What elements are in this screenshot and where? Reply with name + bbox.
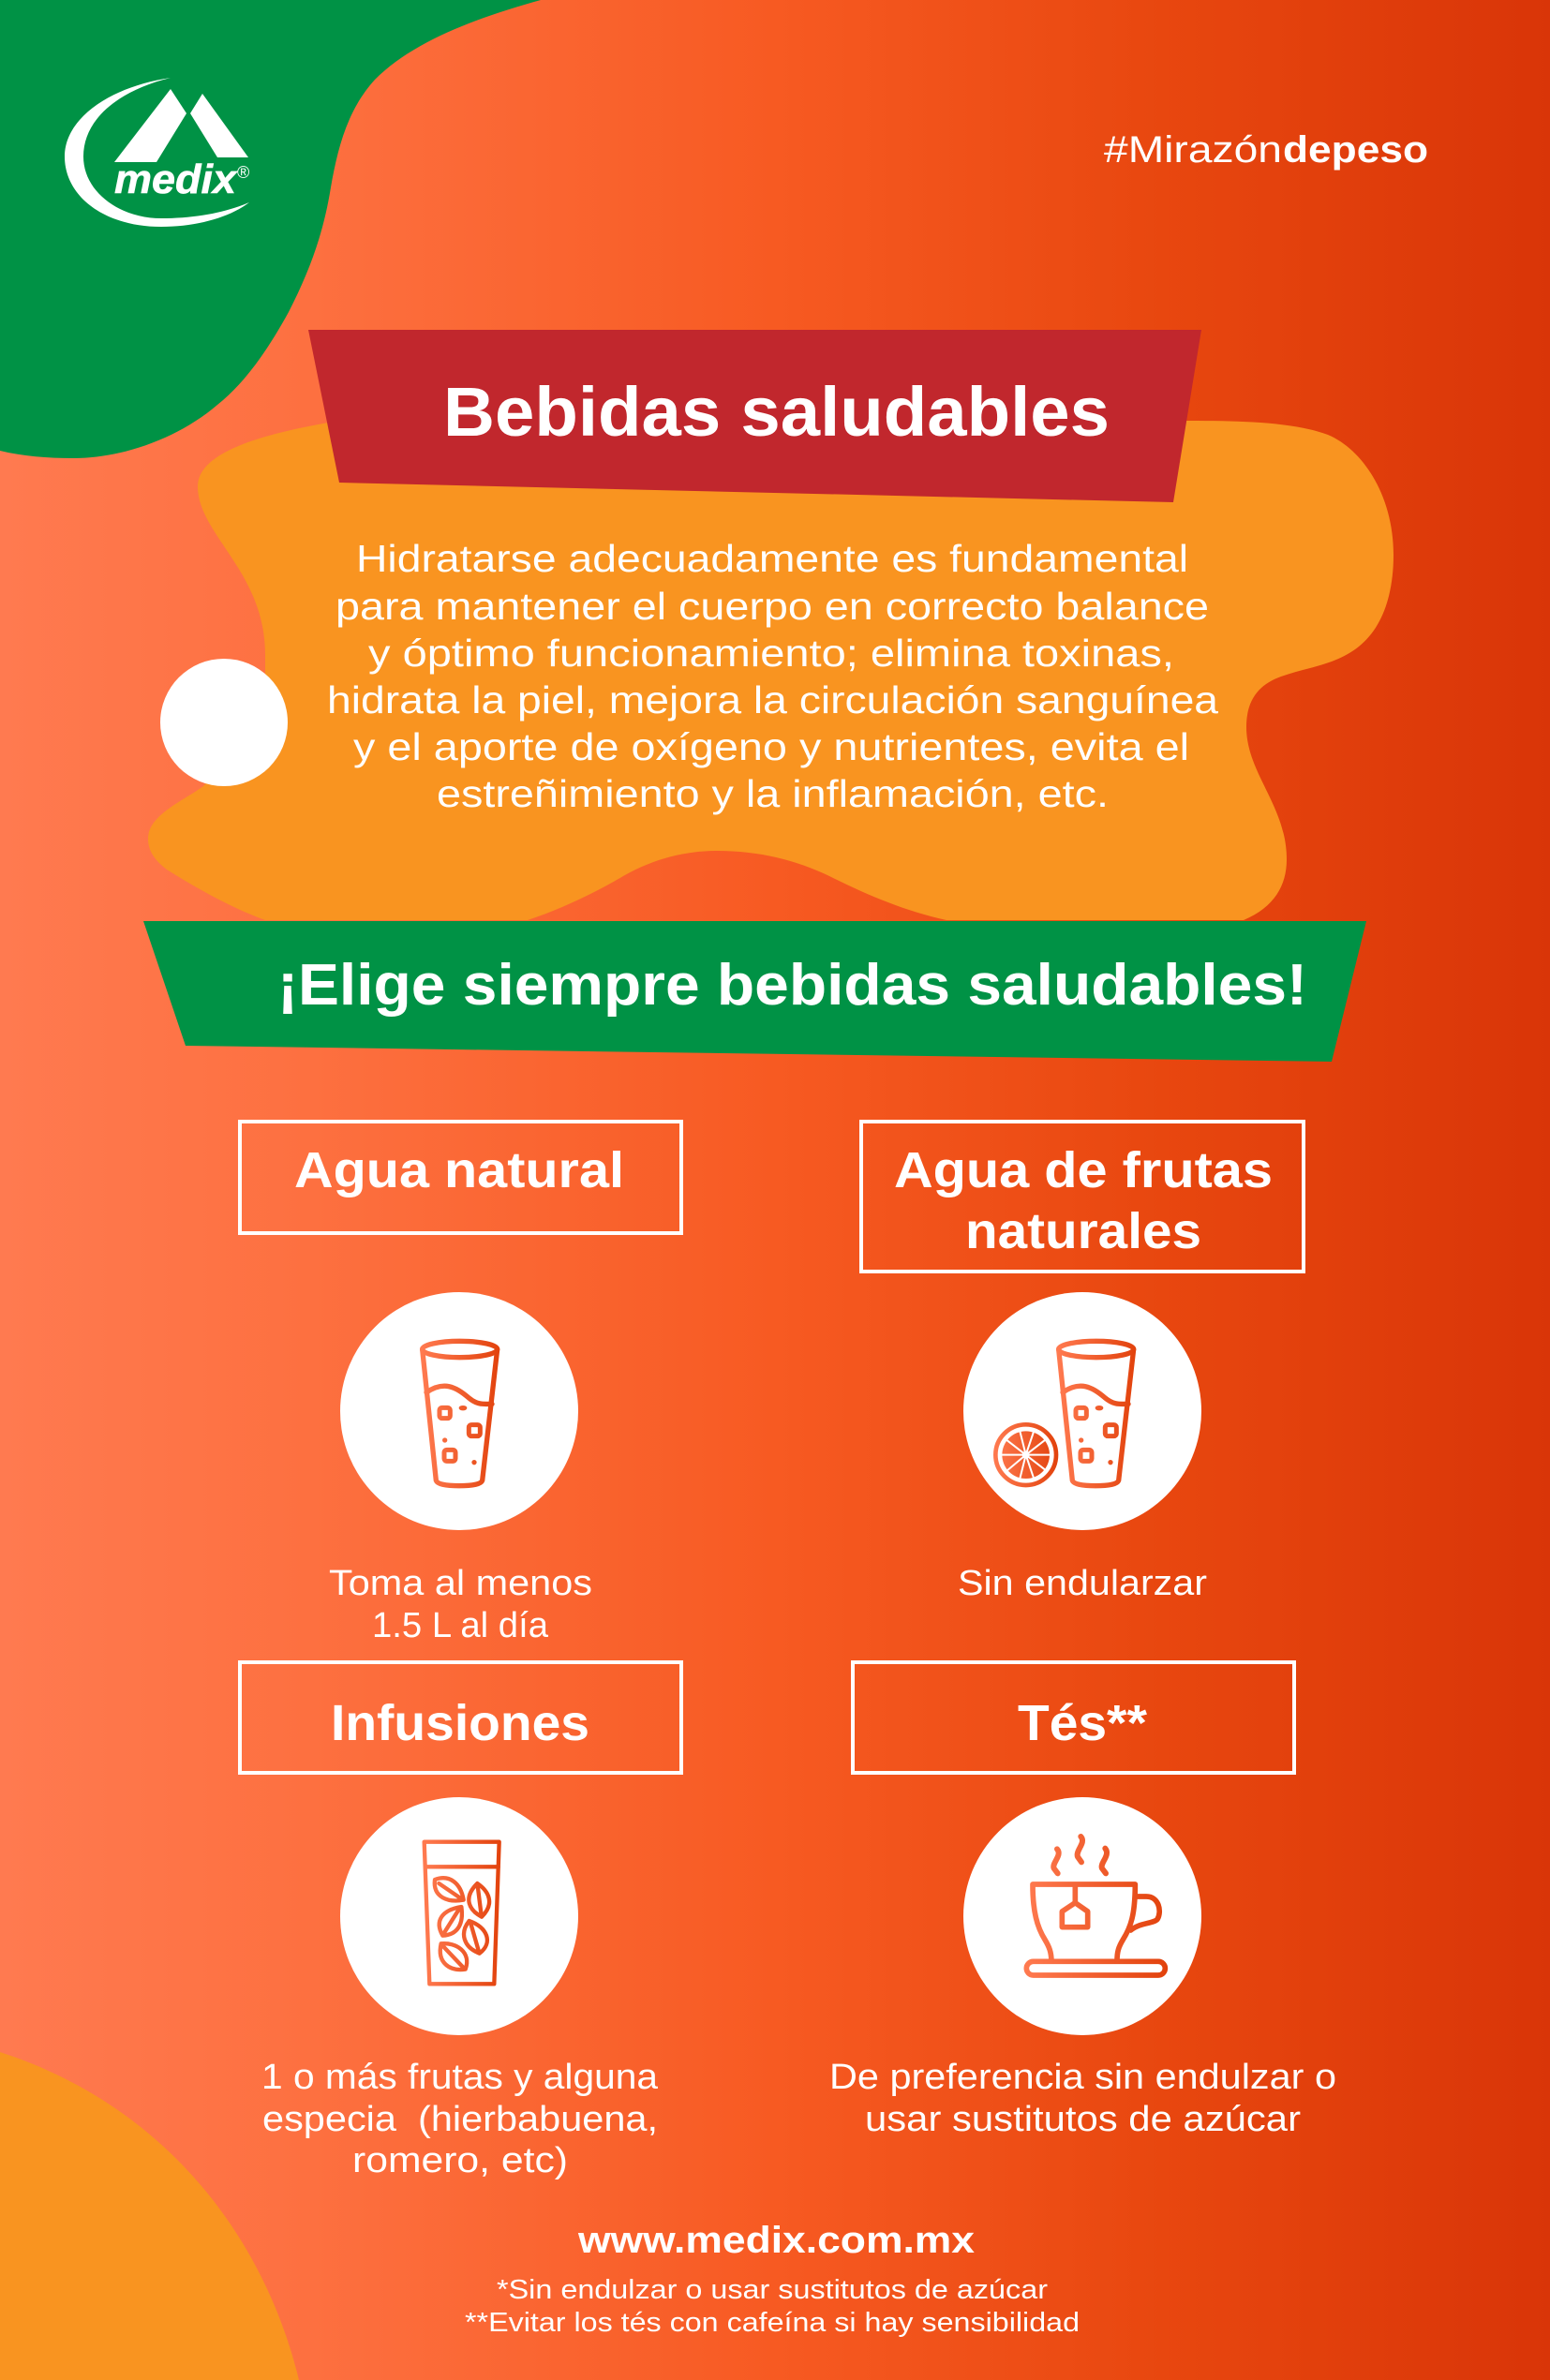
orange intro blob (148, 421, 1394, 920)
caption: infusiones: 1 o más frutas y alguna (261, 2058, 659, 2097)
caption: agua natural (329, 1564, 592, 1645)
card: tes (829, 1662, 1336, 2139)
card: agua natural (240, 1122, 681, 1645)
intro text: Hidratarse adecuadamente es fundamental (356, 537, 1188, 580)
title banner: Bebidas saludables (443, 373, 1110, 451)
caption: infusiones: romero, etc) (352, 2141, 568, 2180)
intro text: y óptimo funcionamiento; elimina toxinas, (368, 632, 1174, 675)
intro text: estreñimiento y la inflamación, etc. (437, 772, 1109, 815)
white circle (160, 659, 288, 786)
icon: glass and orange slice (963, 1292, 1201, 1530)
heading: agua natural (240, 1122, 681, 1233)
logo: medix (65, 78, 249, 227)
card: agua de frutas (861, 1122, 1304, 1603)
caption: agua natural: Toma al menos (329, 1564, 592, 1603)
green banner: ¡Elige siempre bebidas saludables! (277, 953, 1307, 1018)
card: infusiones (240, 1662, 681, 2180)
footnotes (465, 2275, 1080, 2338)
heading: infusiones: Infusiones (331, 1695, 589, 1751)
footnotes: *Sin endulzar o usar sustitutos de azúcar (497, 2275, 1048, 2305)
logo: medix: ® (237, 163, 249, 182)
logo: medix: medix (114, 156, 238, 202)
heading: agua de frutas: Agua de frutas (894, 1142, 1273, 1198)
footnotes: **Evitar los tés con cafeína si hay sensibilidad (465, 2308, 1080, 2338)
caption: infusiones (261, 2058, 659, 2180)
intro text (327, 537, 1218, 815)
heading: tes (853, 1662, 1294, 1773)
heading: agua de frutas: naturales (965, 1203, 1201, 1259)
title banner (308, 330, 1201, 502)
intro text: hidrata la piel, mejora la circulación sanguínea (327, 678, 1218, 721)
hashtag: #Mirazón (1104, 129, 1282, 171)
heading: agua de frutas (861, 1122, 1304, 1272)
heading: tes: Tés** (1018, 1695, 1147, 1751)
icon: tea cup (963, 1797, 1201, 2035)
hashtag: depeso (1283, 129, 1428, 171)
heading: infusiones (240, 1662, 681, 1773)
green corner blob (0, 0, 541, 458)
caption: agua natural: 1.5 L al día (372, 1606, 549, 1645)
heading: agua natural: Agua natural (294, 1142, 624, 1198)
green banner (143, 921, 1366, 1062)
intro text: y el aporte de oxígeno y nutrientes, evita el (353, 725, 1189, 768)
icon: infusion glass with leaves (340, 1797, 578, 2035)
caption: tes (829, 2058, 1336, 2139)
caption: tes: usar sustitutos de azúcar (865, 2100, 1301, 2139)
intro text: para mantener el cuerpo en correcto balance (335, 585, 1209, 628)
caption: infusiones: especia (hierbabuena, (262, 2100, 658, 2139)
icon: glass of water (340, 1292, 578, 1530)
website: www.medix.com.mx (577, 2220, 975, 2261)
orange corner blob (0, 2052, 299, 2380)
caption: tes: De preferencia sin endulzar o (829, 2058, 1336, 2097)
caption: agua de frutas: Sin endularzar (958, 1564, 1207, 1603)
